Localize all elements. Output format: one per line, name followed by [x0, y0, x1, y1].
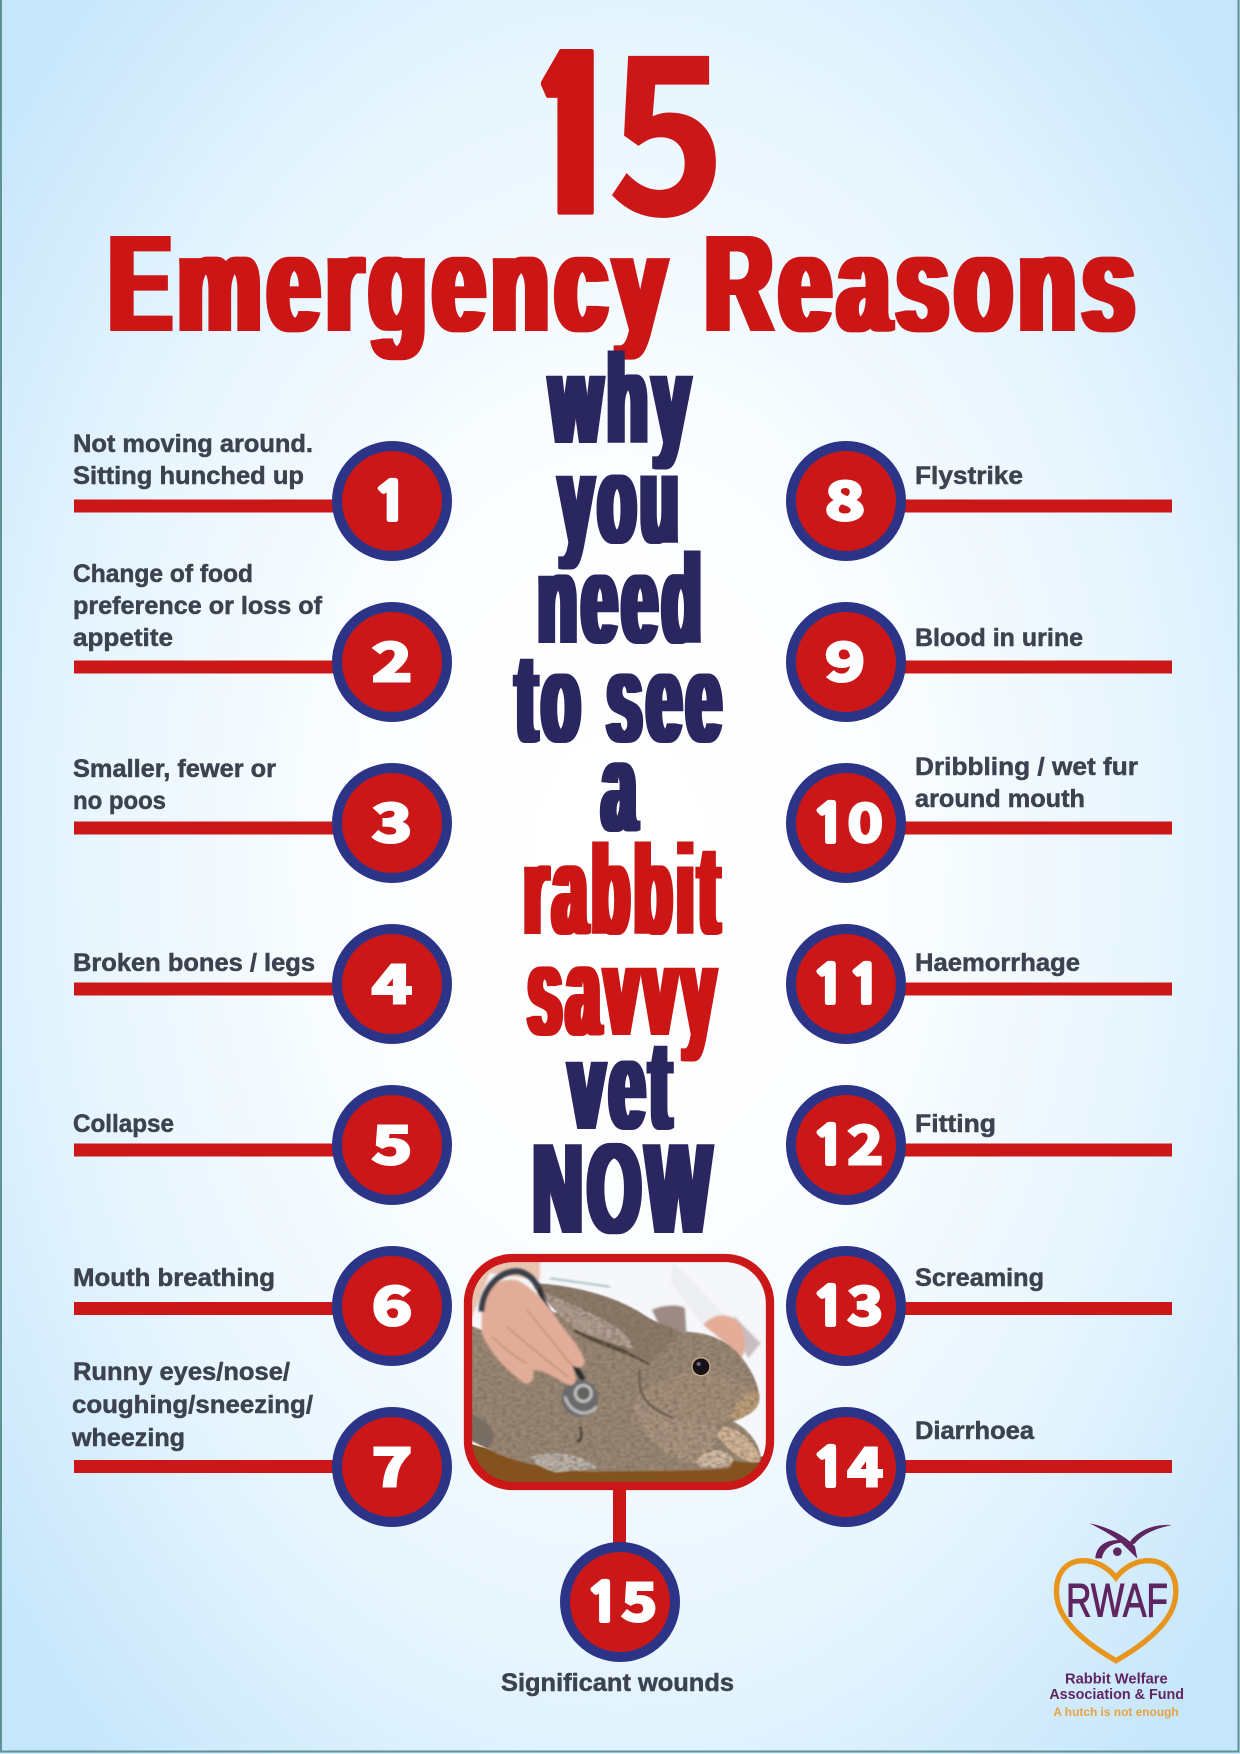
item 12: 12 [811, 1104, 883, 1180]
table [472, 1444, 763, 1482]
title: 15 [538, 0, 726, 277]
central stacked headline: NOW [533, 1117, 716, 1261]
item 9 [791, 607, 1172, 717]
logo: RWAF letters: RWAF [1066, 1575, 1168, 1628]
item 8: Flystrike [915, 462, 1023, 490]
poster: savvy [528, 920, 720, 1062]
item 5: Collapse [73, 1110, 174, 1138]
item 8: 8 [825, 460, 865, 536]
item 7: wheezing [71, 1424, 185, 1452]
central stacked headline: a [602, 716, 641, 858]
item 3: 3 [372, 782, 412, 858]
item 15 [501, 1547, 734, 1697]
item 13: 13 [811, 1265, 883, 1341]
item 11: Haemorrhage [915, 949, 1080, 977]
item 11: 11 [811, 958, 883, 1011]
item 9: Blood in urine [915, 624, 1083, 652]
item 7: coughing/sneezing/ [72, 1391, 313, 1419]
stethoscope [538, 1287, 598, 1417]
item 2 [73, 560, 447, 717]
item 6 [73, 1251, 447, 1361]
item 4 [73, 929, 447, 1039]
item 3: no poos [73, 787, 166, 815]
item 15: Significant wounds [501, 1669, 734, 1697]
item 4: 4 [372, 943, 412, 1019]
item 7 [71, 1358, 447, 1522]
central stacked headline: you [559, 428, 683, 570]
item 6: Mouth breathing [73, 1264, 275, 1292]
item 7: 7 [372, 1426, 412, 1502]
logo: organisation name: A hutch is not enough [1053, 1705, 1179, 1719]
item 14: Diarrhoea [915, 1417, 1035, 1445]
item 9: 9 [825, 621, 865, 697]
item 2: Change of food [73, 560, 253, 588]
item 13 [791, 1251, 1172, 1361]
item 1: Sitting hunched up [73, 462, 304, 490]
item 13: Screaming [915, 1264, 1044, 1292]
connector from photo to item 15 [613, 1488, 626, 1548]
item 2: appetite [73, 624, 173, 652]
central stacked headline: why [549, 328, 695, 470]
item 14 [791, 1412, 1172, 1522]
central stacked headline: vet [569, 1014, 676, 1156]
photo frame [468, 1258, 770, 1486]
item 6: 6 [372, 1265, 412, 1341]
title: 15: 1 [538, 32, 608, 247]
item 10 [791, 753, 1172, 878]
vet hand [482, 1271, 585, 1385]
item 15: 15 [585, 1561, 657, 1637]
white coat backdrop [472, 1262, 762, 1359]
item 4: Broken bones / legs [73, 949, 315, 977]
logo: rabbit bird mark [1089, 1523, 1172, 1559]
rabbit eye [691, 1357, 711, 1376]
item 12: Fitting [915, 1110, 996, 1138]
item 1: Not moving around. [73, 430, 313, 458]
central stacked headline: need [538, 528, 706, 670]
logo: heart outline [1056, 1561, 1176, 1661]
item 3: Smaller, fewer or [73, 755, 276, 783]
item 8 [791, 446, 1172, 556]
logo: organisation name [1049, 1670, 1184, 1719]
item 2: preference or loss of [73, 592, 323, 620]
item 1: 1 [372, 475, 410, 528]
item 12 [791, 1090, 1172, 1200]
logo: organisation name: Rabbit Welfare [1065, 1670, 1168, 1687]
item 5 [73, 1090, 447, 1200]
item 10: around mouth [915, 785, 1085, 813]
item 10: 10 [811, 782, 883, 858]
logo: RWAF [1049, 1523, 1184, 1719]
item 11 [791, 929, 1172, 1039]
item 3 [73, 755, 447, 878]
item 14: 14 [811, 1426, 883, 1502]
poster: to see [516, 627, 726, 769]
item 5: 5 [372, 1104, 412, 1180]
rabbit [457, 1283, 761, 1473]
logo: organisation name: Association & Fund [1049, 1686, 1184, 1703]
item 10: Dribbling / wet fur [915, 753, 1138, 781]
photo: vet examining rabbit [457, 1250, 780, 1493]
central stacked headline [516, 328, 726, 1261]
item 2: 2 [372, 621, 412, 697]
item 7: Runny eyes/nose/ [73, 1358, 290, 1386]
item 1 [73, 430, 447, 556]
poster: rabbit [524, 819, 724, 961]
